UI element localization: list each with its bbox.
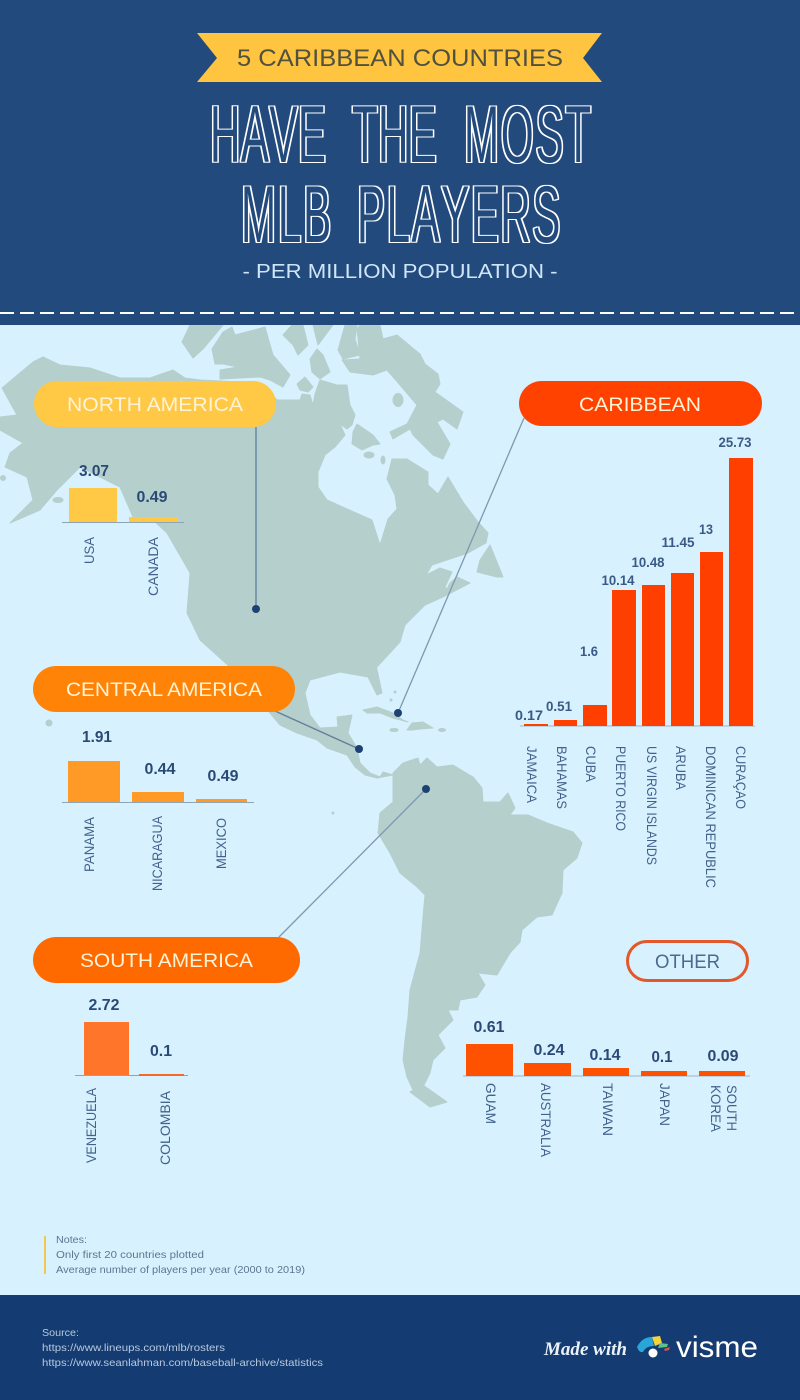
source text: Source: (42, 1327, 79, 1339)
header band (0, 0, 800, 325)
heading: south america: SOUTH AMERICA (80, 951, 253, 972)
panel: north america (34, 381, 276, 596)
bar chart: south america: 0.1 (150, 1043, 172, 1060)
bar chart: south america: 2.72 (88, 997, 120, 1014)
bar chart: south america (75, 997, 188, 1165)
notes: Notes: (56, 1234, 87, 1246)
title: THE (352, 89, 437, 180)
heading: caribbean (519, 381, 762, 426)
bar chart: other: AUSTRALIA (538, 1083, 554, 1158)
panel: south america (33, 937, 300, 1165)
bar chart: central america: NICARAGUA (149, 815, 165, 891)
heading: south america (33, 937, 300, 983)
panel: central america (33, 666, 295, 891)
title: MOST (464, 89, 591, 180)
heading: other: OTHER (655, 952, 720, 973)
bar chart: caribbean: 0.17 (515, 708, 543, 723)
bar chart: caribbean (515, 435, 755, 888)
bar chart: central america (62, 729, 254, 891)
title (210, 89, 591, 260)
bar chart: other: TAIWAN (600, 1083, 616, 1136)
notes (44, 1234, 305, 1276)
connector: north america (252, 427, 260, 613)
bar chart: central america: 0.49 (208, 768, 239, 785)
bar chart: north america: 3.07 (79, 463, 109, 480)
panel: other (463, 942, 750, 1158)
bar chart: north america: 0.49 (136, 489, 168, 506)
title: PLAYERS (357, 169, 560, 260)
source text: https://www.lineups.com/mlb/rosters (42, 1342, 225, 1354)
bar chart: other: 0.61 (474, 1019, 505, 1036)
connector: central america (275, 711, 363, 753)
subtitle: - PER MILLION POPULATION - (242, 261, 558, 283)
notes: Only first 20 countries plotted (56, 1249, 204, 1261)
bar chart: caribbean: 13 (699, 522, 713, 537)
heading: north america: NORTH AMERICA (67, 395, 243, 416)
bar chart: caribbean: 0.51 (546, 699, 572, 714)
bar chart: caribbean: US VIRGIN ISLANDS (644, 746, 660, 865)
bar chart: other: 0.09 (708, 1048, 739, 1065)
heading: other (628, 942, 748, 980)
bar chart: other: KOREA (708, 1085, 724, 1133)
bar chart: caribbean: DOMINICAN REPUBLIC (703, 746, 719, 888)
heading: central america (33, 666, 295, 712)
bar chart: caribbean: 10.48 (632, 555, 665, 570)
bar chart: other (463, 1019, 750, 1158)
bar chart: other: 0.24 (534, 1042, 565, 1059)
panel: caribbean (515, 381, 762, 888)
connector: south america (279, 785, 430, 937)
bar chart: north america (62, 463, 184, 596)
bar chart: central america: MEXICO (213, 818, 229, 869)
title: MLB (241, 169, 331, 260)
bar chart: central america: 1.91 (82, 729, 112, 746)
bar chart: north america: USA (81, 536, 97, 564)
made with visme logo: Made with (543, 1339, 627, 1360)
ribbon banner: 5 CARIBBEAN COUNTRIES (237, 45, 563, 72)
bar chart: caribbean: 1.6 (580, 644, 598, 659)
heading: central america: CENTRAL AMERICA (66, 680, 262, 701)
bar chart: caribbean: PUERTO RICO (613, 746, 629, 831)
notes: Average number of players per year (2000 to 2019) (56, 1264, 305, 1276)
map of the Americas (0, 325, 582, 1107)
bar chart: north america: CANADA (145, 536, 161, 596)
bar chart: caribbean: JAMAICA (524, 746, 540, 804)
bar chart: caribbean: CURAÇAO (733, 746, 749, 809)
bar chart: caribbean: 10.14 (602, 573, 635, 588)
bar chart: caribbean: 25.73 (718, 435, 752, 450)
ribbon banner (197, 33, 602, 82)
bar chart: south america: VENEZUELA (83, 1087, 99, 1163)
source text (42, 1327, 323, 1369)
made with visme logo: visme (676, 1331, 758, 1364)
bar chart: south america: COLOMBIA (157, 1090, 173, 1165)
made with visme logo (543, 1331, 758, 1364)
icon: visme fan (637, 1336, 670, 1358)
bar chart: central america: 0.44 (144, 761, 176, 778)
bar chart: caribbean: 11.45 (662, 535, 695, 550)
title: HAVE (210, 89, 326, 180)
bar chart: other: JAPAN (657, 1083, 673, 1126)
bar chart: caribbean: BAHAMAS (554, 746, 570, 809)
footer band (0, 1295, 800, 1400)
bar chart: caribbean: ARUBA (673, 746, 689, 791)
bar chart: other: 0.14 (590, 1047, 621, 1064)
bar chart: caribbean: CUBA (583, 746, 599, 783)
bar chart: central america: PANAMA (81, 816, 97, 872)
source text: https://www.seanlahman.com/baseball-archive/statistics (42, 1357, 323, 1369)
bar chart: other: GUAM (483, 1083, 499, 1124)
connector: caribbean (394, 418, 524, 717)
bar chart: other: 0.1 (652, 1049, 673, 1066)
bar chart: other: SOUTH (724, 1085, 740, 1131)
heading: north america (34, 381, 276, 427)
heading: caribbean: CARIBBEAN (579, 395, 701, 416)
